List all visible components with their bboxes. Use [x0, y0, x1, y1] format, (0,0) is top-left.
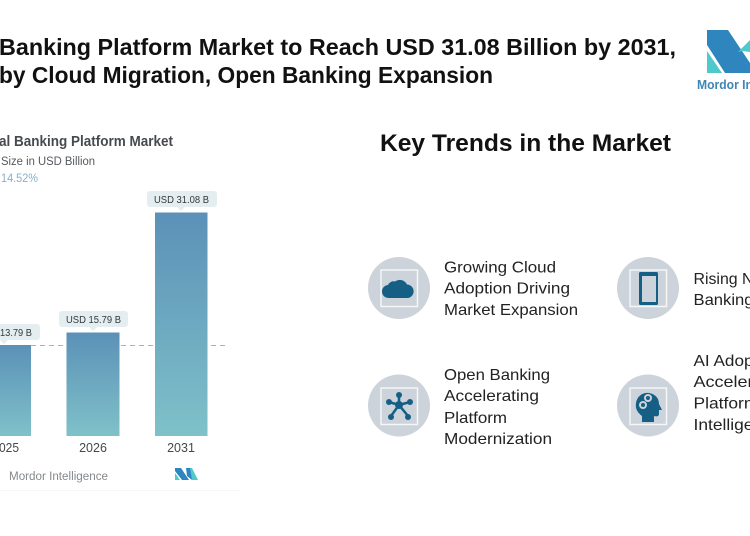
logo: Mordor Intelligence — [697, 30, 750, 92]
heading: Key Trends in the Market: Key Trends in the Market — [380, 130, 671, 157]
bar 2026: 2026 — [79, 441, 107, 455]
text: Intellige — [694, 417, 750, 434]
bar 2031 — [147, 191, 217, 455]
bar 2026: USD 15.79 B — [66, 315, 121, 326]
text — [444, 367, 552, 448]
text: AI Adop — [694, 353, 750, 370]
text — [444, 260, 578, 319]
text: Market Expansion — [444, 302, 578, 319]
bar 2025: 13.79 B — [0, 328, 32, 339]
text: Platforn — [694, 396, 750, 412]
icon: smartphone — [617, 257, 679, 319]
text: Banking — [694, 292, 750, 309]
text — [694, 353, 750, 434]
trend: open banking — [368, 367, 552, 448]
text: Accelerating — [444, 388, 539, 405]
text: Acceler — [694, 374, 750, 391]
chart mini logo — [175, 468, 198, 480]
icon: network hub — [368, 374, 430, 436]
title: by Cloud Migration, Open Banking Expansion — [0, 62, 493, 88]
text: Growing Cloud — [444, 260, 556, 276]
trend: AI adoption — [617, 353, 750, 436]
chart: market size bars — [0, 134, 227, 483]
title — [0, 34, 676, 88]
text: Modernization — [444, 431, 552, 448]
text: Open Banking — [444, 367, 550, 384]
text: Adoption Driving — [444, 280, 570, 298]
text — [694, 271, 750, 309]
title: Banking Platform Market to Reach USD 31.08 Billion by 2031, — [0, 34, 676, 60]
chart source: Mordor Intelligence — [9, 471, 108, 483]
CAGR value: 14.52% — [1, 173, 38, 185]
trend: mobile banking — [617, 257, 750, 319]
text: Platform — [444, 410, 507, 427]
chart title: al Banking Platform Market — [0, 134, 173, 150]
bar 2026 — [59, 311, 128, 455]
bar 2025 — [0, 324, 40, 455]
chart subtitle: Size in USD Billion — [1, 156, 95, 168]
trend: cloud adoption — [368, 257, 578, 319]
reference dashed line — [31, 344, 227, 346]
bar 2031: USD 31.08 B — [154, 195, 209, 206]
bar 2031: 2031 — [167, 441, 195, 455]
icon: cloud — [368, 257, 430, 319]
icon: head with gears — [617, 374, 679, 436]
